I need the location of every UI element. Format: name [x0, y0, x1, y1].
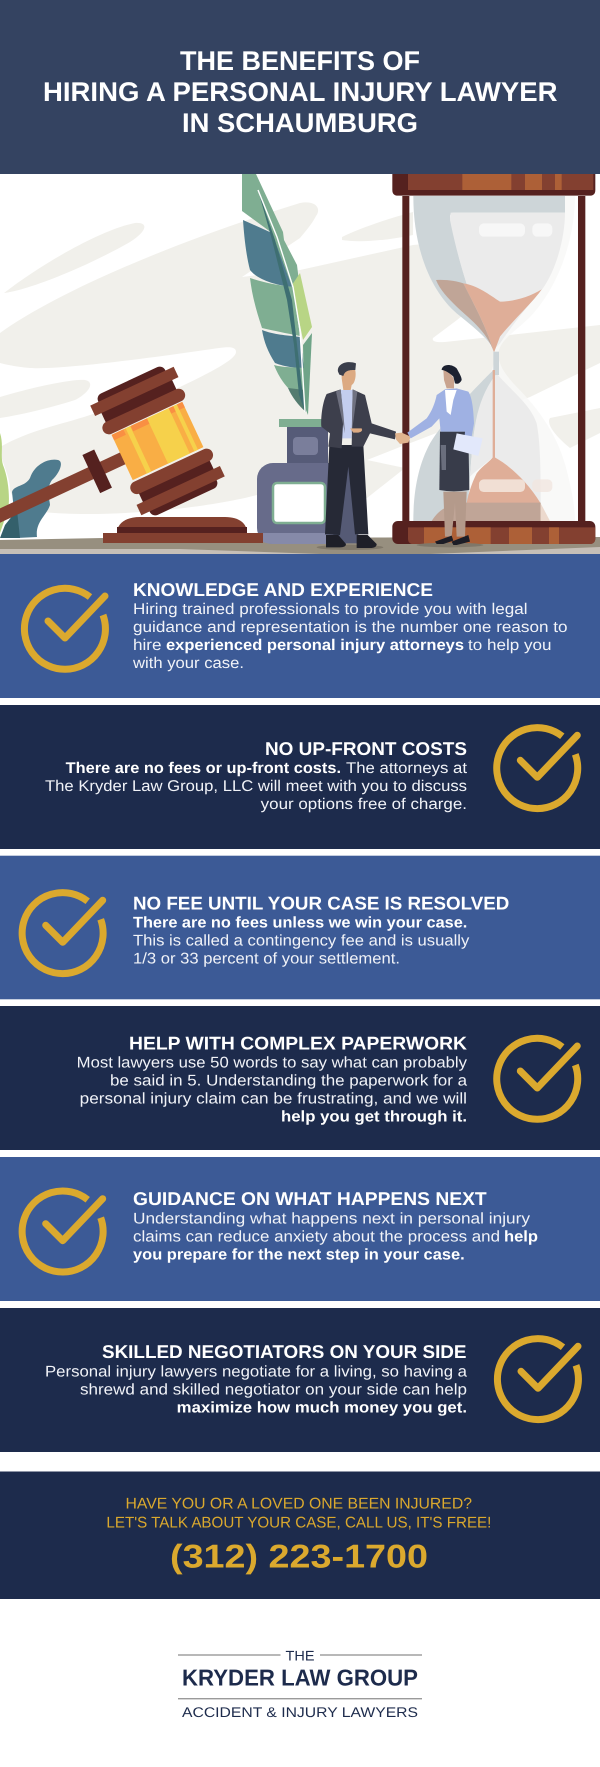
text: no up-front costs: The Kryder Law Group, LLC will meet with you to discuss: [45, 778, 467, 795]
text: no up-front costs: The attorneys at: [346, 760, 468, 777]
background blobs: [0, 202, 600, 514]
header panel: [0, 0, 600, 174]
title: IN SCHAUMBURG: [182, 108, 418, 138]
text: no fee until your case is resolved: NO FEE UNTIL YOUR CASE IS RESOLVED: [133, 892, 509, 913]
text: no fee until your case is resolved: There are no fees unless we win your case.: [133, 914, 467, 931]
text: guidance on what happens next: GUIDANCE ON WHAT HAPPENS NEXT: [133, 1188, 487, 1209]
text: skilled negotiators on your side: [45, 1341, 467, 1416]
icon: feather quill: [242, 174, 312, 415]
panel: no up-front costs: [0, 705, 600, 849]
icon: gold check: [22, 893, 103, 974]
text: knowledge and experience: guidance and representation is the number one reason to: [133, 619, 568, 636]
title: THE BENEFITS OF: [180, 46, 420, 76]
text: no up-front costs: There are no fees or up-front costs.: [66, 760, 341, 777]
panel: call to action: [0, 1472, 600, 1599]
text: guidance on what happens next: you prepare for the next step in your case.: [133, 1246, 465, 1263]
woman in skirt: [407, 365, 483, 547]
icon: plant: [0, 433, 61, 538]
man in suit: [317, 362, 411, 550]
icon: gold check: [497, 728, 578, 809]
title: HIRING A PERSONAL INJURY LAWYER: [43, 77, 558, 107]
text: skilled negotiators on your side: Personal injury lawyers negotiate for a living, so having a: [45, 1363, 467, 1380]
icon: gold check: [497, 1339, 578, 1420]
icon: gold check: [24, 588, 105, 669]
text: guidance on what happens next: help: [504, 1228, 538, 1245]
text: no fee until your case is resolved: This is called a contingency fee and is usually: [133, 932, 470, 949]
text: knowledge and experience: to help you: [468, 637, 552, 654]
text: no up-front costs: your options free of charge.: [261, 796, 467, 813]
callout text: LET'S TALK ABOUT YOUR CASE, CALL US, IT'S FREE!: [106, 1515, 491, 1532]
text: guidance on what happens next: claims can reduce anxiety about the process and: [133, 1228, 500, 1245]
text: help with complex paperwork: be said in 5. Understanding the paperwork for a: [110, 1072, 467, 1089]
text: skilled negotiators on your side: shrewd and skilled negotiator on your side can help: [80, 1381, 467, 1398]
text: skilled negotiators on your side: maximize how much money you get.: [177, 1399, 467, 1416]
text: knowledge and experience: hire: [133, 637, 162, 654]
title: [43, 46, 558, 138]
text: help with complex paperwork: [77, 1032, 468, 1126]
ground: [0, 537, 600, 554]
hero illustration: [0, 174, 600, 582]
callout text: HAVE YOU OR A LOVED ONE BEEN INJURED?: [126, 1496, 472, 1513]
text: no fee until your case is resolved: [133, 892, 509, 967]
logo: the kryder law group: THE: [286, 1648, 314, 1664]
text: no up-front costs: NO UP-FRONT COSTS: [265, 738, 467, 759]
text: knowledge and experience: with your case.: [132, 655, 244, 672]
text: knowledge and experience: Hiring trained professionals to provide you with legal: [133, 601, 528, 618]
icon: ink bottle: [257, 419, 357, 544]
text: help with complex paperwork: help you get through it.: [281, 1109, 467, 1126]
logo: the kryder law group: [178, 1648, 422, 1720]
text: guidance on what happens next: [133, 1188, 538, 1263]
panel: skilled negotiators on your side: [0, 1308, 600, 1452]
icon: gavel sound block: [103, 517, 263, 543]
text: help with complex paperwork: HELP WITH COMPLEX PAPERWORK: [129, 1032, 468, 1053]
panel: no fee until your case is resolved: [0, 856, 600, 999]
text: no up-front costs: [45, 738, 468, 813]
text: help with complex paperwork: personal injury claim can be frustrating, and we will: [80, 1090, 467, 1108]
logo: the kryder law group: ACCIDENT & INJURY LAWYERS: [182, 1704, 418, 1720]
text: knowledge and experience: [132, 579, 568, 672]
logo: the kryder law group: KRYDER LAW GROUP: [182, 1664, 418, 1690]
panel: knowledge and experience: [0, 554, 600, 698]
text: knowledge and experience: KNOWLEDGE AND EXPERIENCE: [133, 579, 433, 600]
text: guidance on what happens next: Understanding what happens next in personal injury: [133, 1210, 530, 1227]
callout text: [106, 1496, 491, 1532]
phone number: (312) 223-1700: [170, 1538, 428, 1575]
icon: gavel: [0, 361, 228, 582]
panel: guidance on what happens next: [0, 1157, 600, 1301]
text: knowledge and experience: experienced personal injury attorneys: [166, 637, 464, 654]
text: no fee until your case is resolved: 1/3 or 33 percent of your settlement.: [133, 950, 400, 967]
text: help with complex paperwork: Most lawyers use 50 words to say what can probably: [77, 1054, 467, 1071]
panel: help with complex paperwork: [0, 1006, 600, 1150]
icon: gold check: [22, 1191, 103, 1272]
icon: gold check: [497, 1038, 578, 1119]
text: skilled negotiators on your side: SKILLED NEGOTIATORS ON YOUR SIDE: [102, 1341, 466, 1362]
icon: hourglass: [392, 174, 595, 544]
